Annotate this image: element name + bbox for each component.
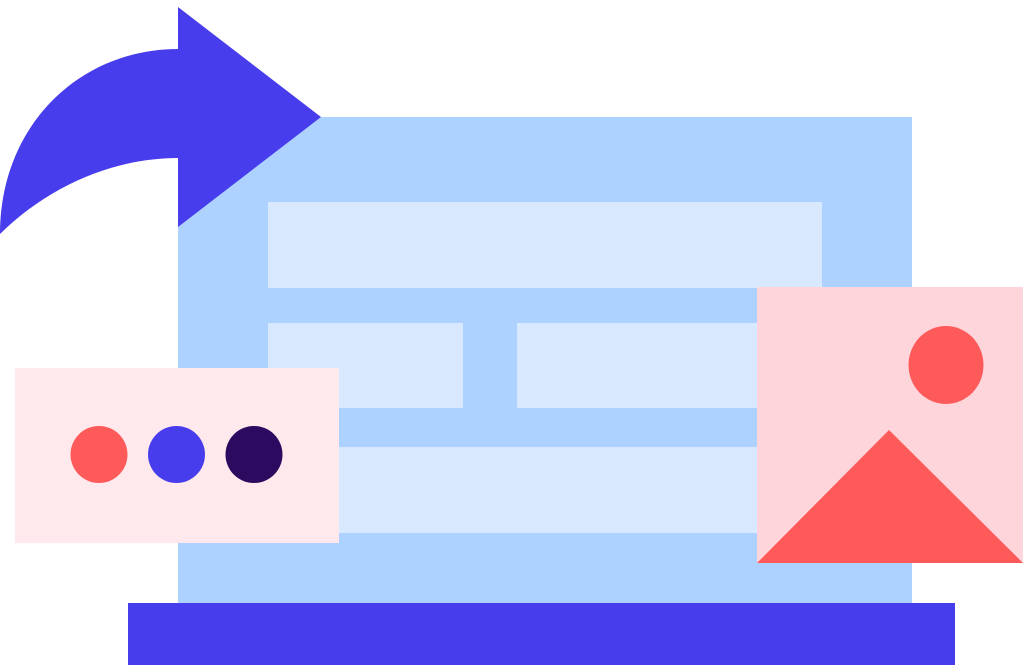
laptop base bbox=[128, 603, 955, 665]
content block: middle left bbox=[268, 323, 463, 408]
content block: top banner bbox=[268, 202, 822, 288]
dot: dark purple bbox=[226, 426, 282, 483]
dot: red bbox=[70, 426, 128, 483]
panel: dots card bbox=[15, 368, 339, 543]
content block: bottom bbox=[330, 447, 767, 533]
icon: sun bbox=[908, 326, 984, 404]
icon: mountain bbox=[757, 430, 1023, 563]
dot: blue bbox=[148, 426, 205, 483]
content block: middle right bbox=[517, 323, 767, 408]
icon: curved arrow bbox=[0, 7, 321, 234]
panel: laptop screen bbox=[178, 117, 912, 603]
panel: image card bbox=[757, 287, 1023, 563]
